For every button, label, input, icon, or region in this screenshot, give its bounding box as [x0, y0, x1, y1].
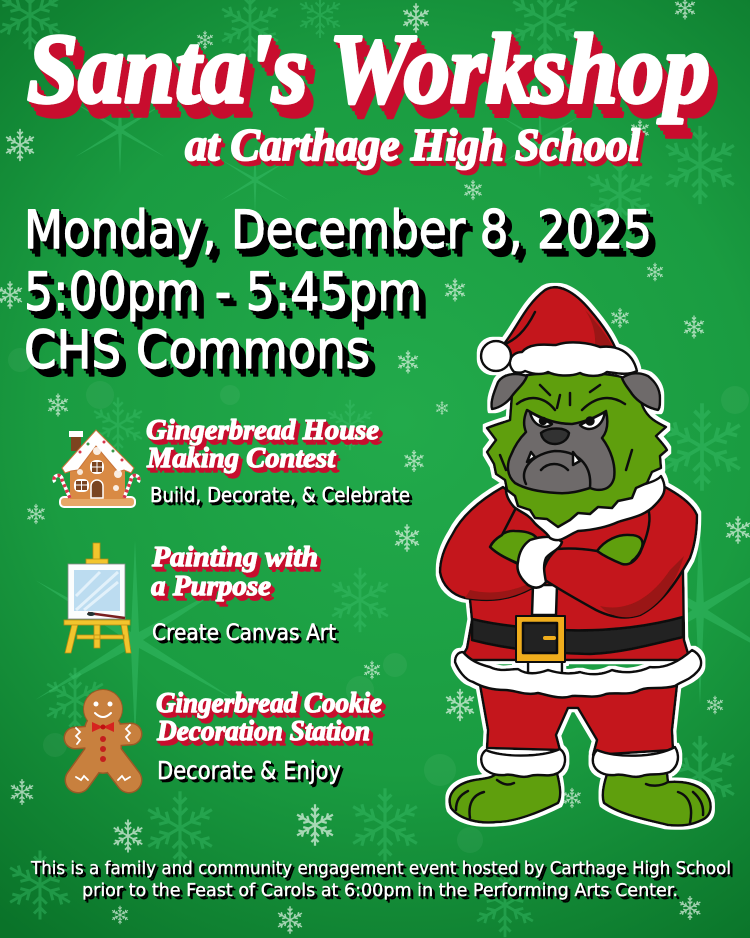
nose — [541, 428, 569, 444]
activity 3 heading: Decoration Station — [156, 715, 370, 747]
collar fur — [506, 476, 665, 540]
activity 3 heading: Gingerbread Cookie — [156, 687, 382, 719]
left foot — [450, 773, 560, 822]
activity 1 heading: Gingerbread House — [146, 414, 379, 446]
jacket body — [460, 490, 690, 660]
activity 1 description: Build, Decorate, & Celebrate — [150, 483, 410, 507]
placket — [532, 585, 557, 615]
footer note — [30, 858, 731, 901]
head fur — [487, 372, 667, 527]
fangs — [527, 452, 580, 465]
activity 2 heading — [151, 541, 318, 602]
jacket hem fur — [455, 650, 701, 698]
left arm sleeve — [440, 487, 532, 600]
lower placket — [528, 660, 562, 680]
illustration: grumpy bulldog Santa — [440, 287, 711, 825]
right foot — [603, 773, 711, 825]
icon: gingerbread man — [75, 689, 131, 780]
event date, time and place: CHS Commons — [24, 320, 370, 381]
icon: gingerbread house — [54, 430, 139, 507]
background: soft bokeh dots — [8, 218, 749, 853]
hat fur band — [510, 342, 637, 376]
Santa hat — [503, 287, 617, 362]
title: Santa's Workshop — [27, 13, 710, 124]
right hand — [597, 535, 642, 565]
buckle — [516, 616, 565, 662]
event date, time and place: Monday, December 8, 2025 — [24, 200, 652, 261]
activity 1 heading — [146, 414, 379, 474]
activity 3 heading — [156, 687, 382, 747]
hat pompom — [481, 341, 511, 371]
belt — [472, 617, 683, 654]
subtitle: at Carthage High School — [185, 119, 640, 170]
activity 2 heading: a Purpose — [151, 570, 271, 602]
muzzle and eye patches — [508, 410, 614, 493]
background: pale star bursts — [35, 85, 750, 740]
activity 2 description: Create Canvas Art — [152, 621, 336, 646]
event date, time and place — [24, 200, 652, 381]
eyes — [530, 412, 605, 429]
icon: painting easel — [64, 543, 131, 653]
ears — [491, 373, 660, 410]
activity 3 description: Decorate & Enjoy — [157, 756, 341, 785]
left hand — [490, 531, 536, 565]
activity 2 heading: Painting with — [151, 541, 318, 573]
footer note: prior to the Feast of Carols at 6:00pm in the Performing Arts Center. — [82, 880, 678, 901]
sleeve cuff fur — [517, 537, 562, 588]
sleeve shadow — [465, 556, 684, 617]
boot cuffs — [481, 747, 678, 777]
trousers — [480, 685, 677, 755]
event date, time and place: 5:00pm - 5:45pm — [24, 262, 422, 323]
activity 1 heading: Making Contest — [146, 442, 336, 474]
right arm sleeve — [544, 487, 697, 617]
